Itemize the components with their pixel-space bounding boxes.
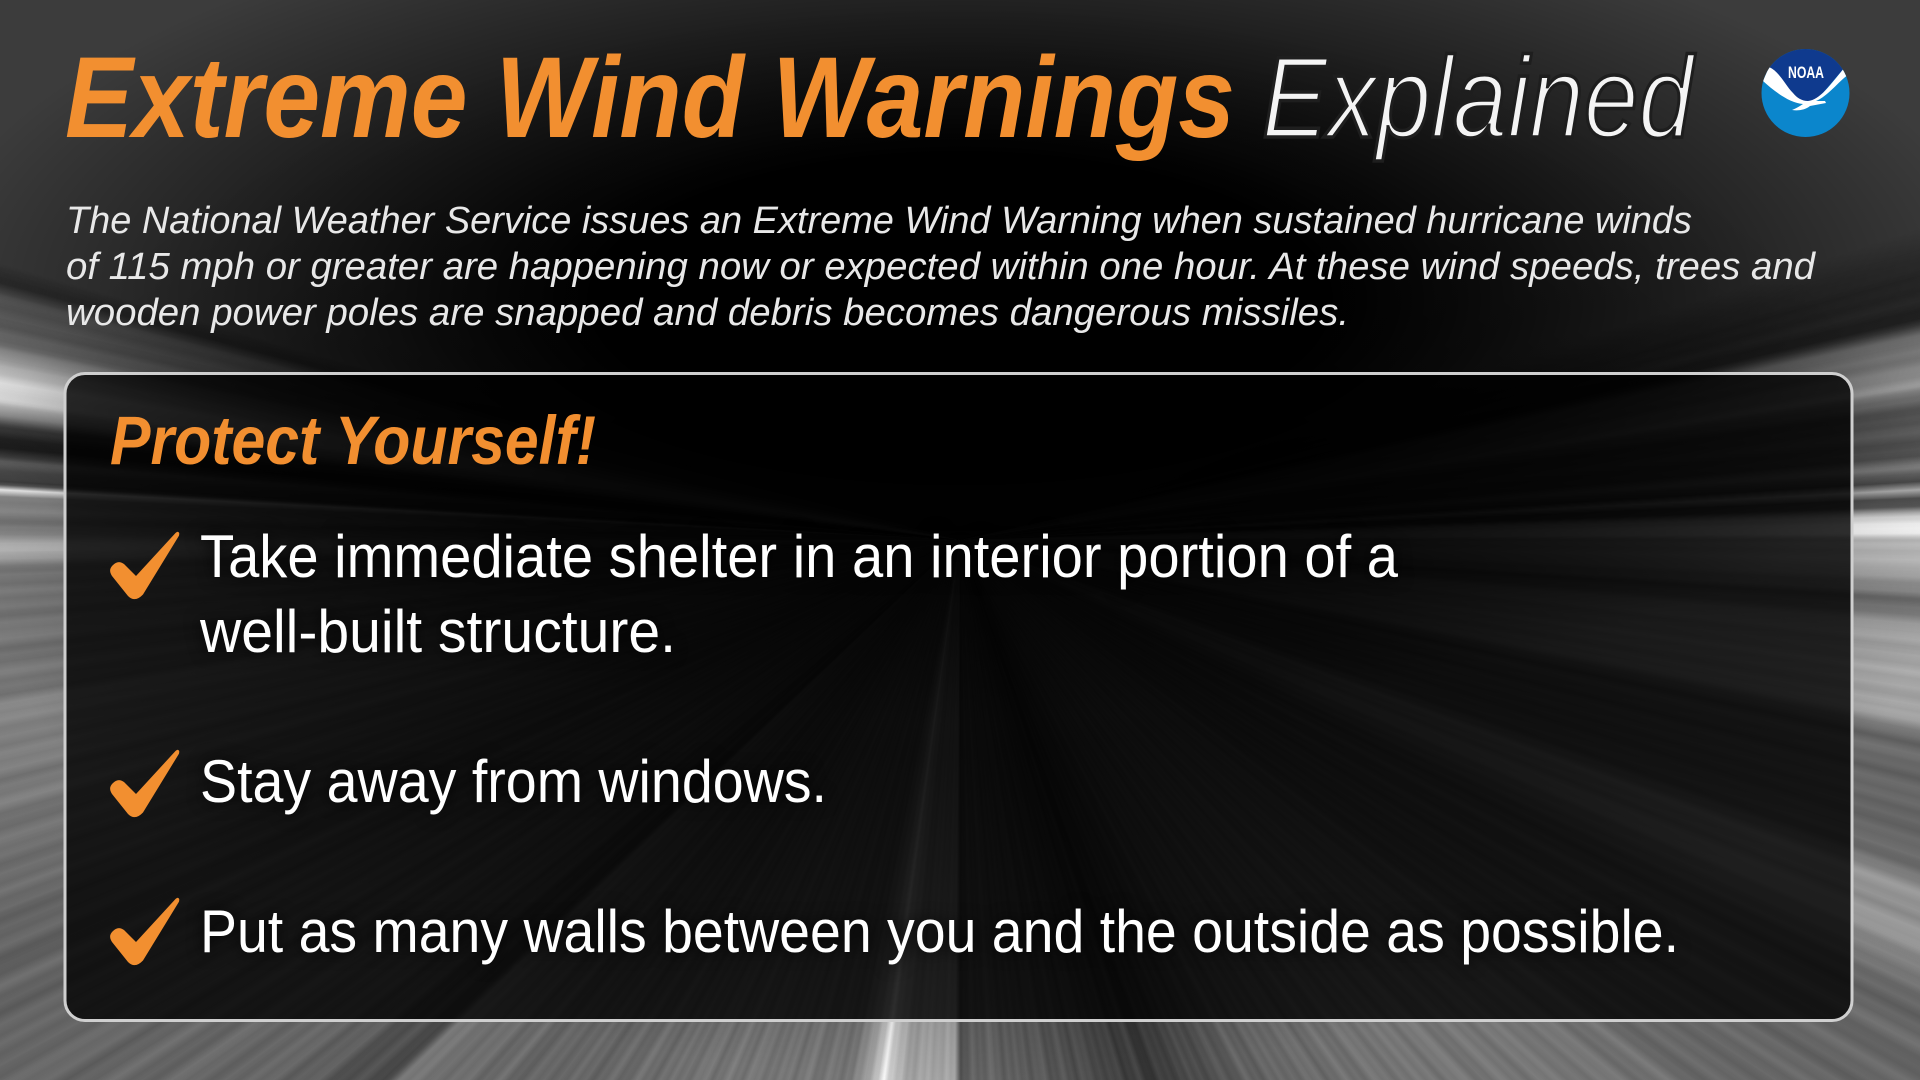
title: bold orange part: Extreme Wind Warnings	[65, 34, 1235, 162]
item 1 text: Take immediate shelter in an interior portion of a	[200, 523, 1399, 590]
intro paragraph: wooden power poles are snapped and debris becomes dangerous missiles.	[66, 292, 1349, 334]
item 3 text: Put as many walls between you and the outside as possible.	[200, 898, 1679, 965]
panel: protect yourself	[65, 374, 1852, 1020]
icon: check mark	[110, 898, 179, 965]
checklist item 3	[110, 898, 1679, 965]
icon: NOAA logo	[1762, 49, 1850, 137]
icon: NOAA logo: NOAA	[1788, 64, 1824, 82]
title: light white part: Explained	[1262, 34, 1696, 162]
icon: check mark	[110, 750, 179, 817]
intro paragraph	[66, 200, 1817, 334]
icon: check mark	[110, 532, 179, 599]
item 1 text	[199, 523, 1399, 665]
intro paragraph: of 115 mph or greater are happening now or expected within one hour. At these wind speeds, trees and	[66, 246, 1817, 288]
item 2 text: Stay away from windows.	[200, 748, 827, 815]
panel heading: Protect Yourself!	[110, 402, 596, 479]
panel background	[65, 374, 1852, 1020]
intro paragraph: The National Weather Service issues an Extreme Wind Warning when sustained hurricane winds	[66, 200, 1692, 242]
title	[65, 34, 1696, 162]
checklist item 1	[110, 523, 1399, 665]
item 1 text: well-built structure.	[199, 598, 676, 665]
checklist item 2	[110, 748, 827, 817]
